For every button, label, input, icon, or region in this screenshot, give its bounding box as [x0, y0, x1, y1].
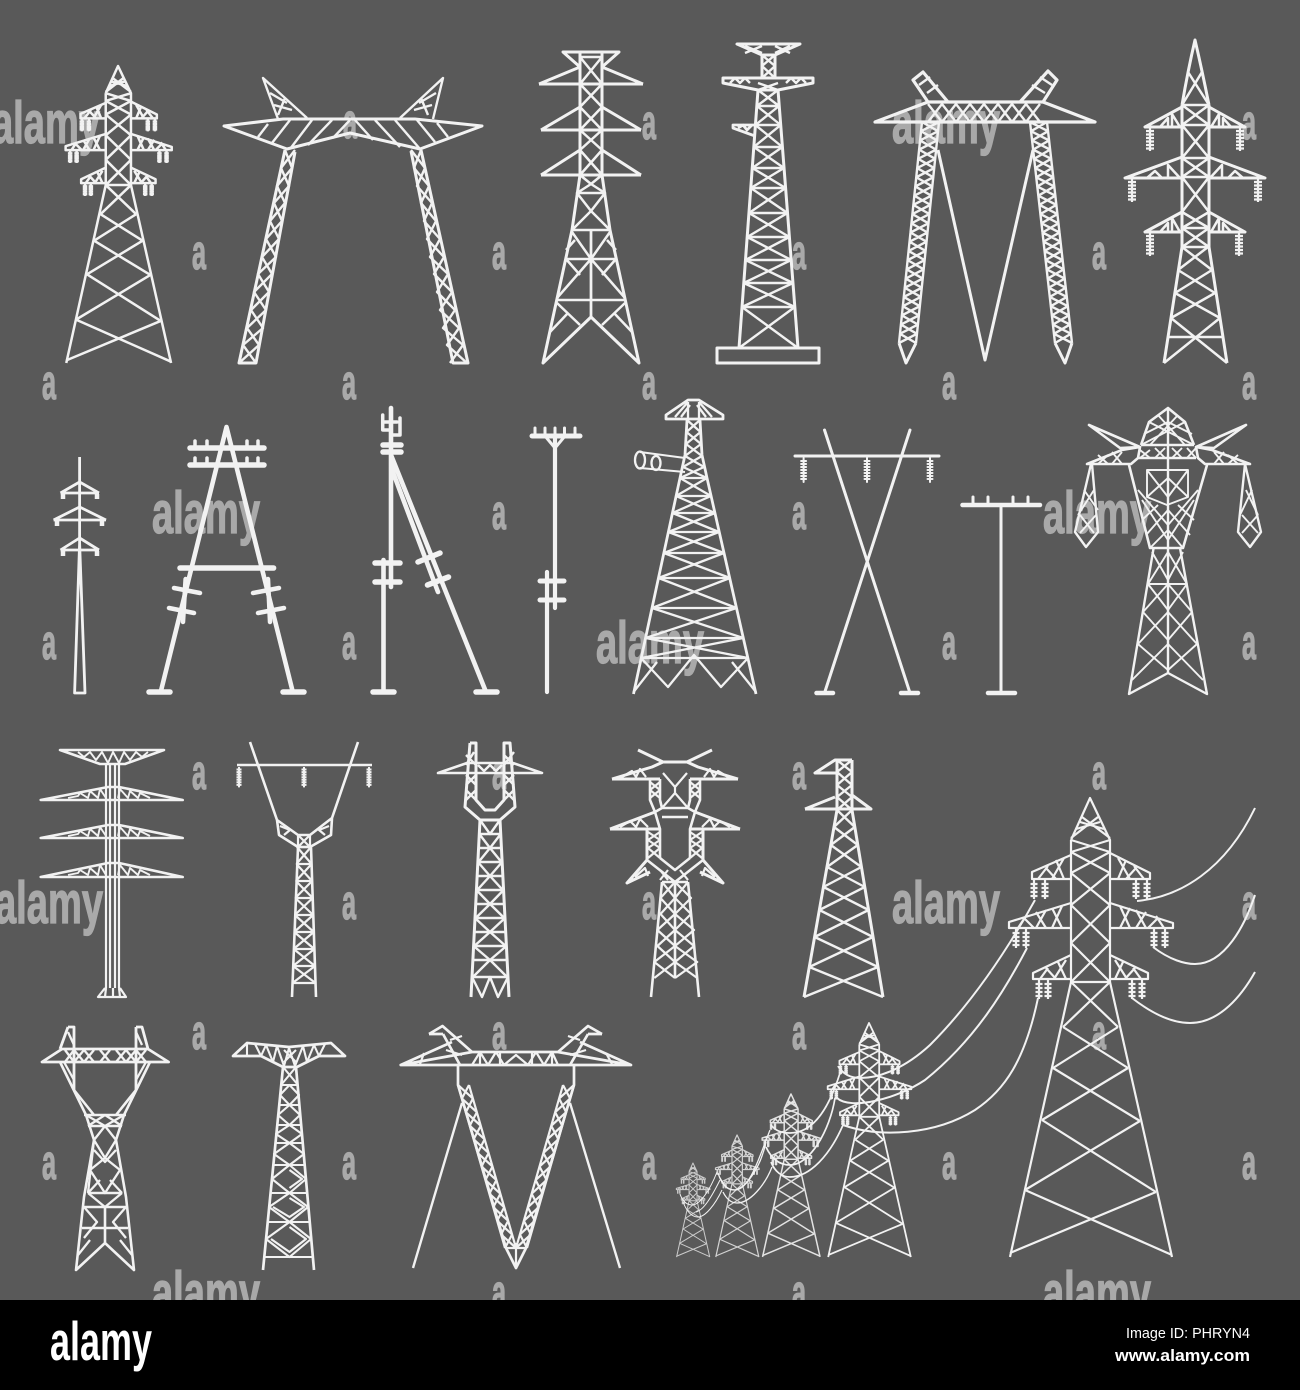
tower 5: M-shaped guyed pylon	[875, 71, 1095, 363]
power line: smallest tower in the chain	[676, 1163, 710, 1257]
tower 7: slim pole with small arms	[54, 457, 106, 693]
watermarks: a	[343, 95, 357, 149]
tower 20: beam-topped waisted pylon	[42, 1027, 169, 1270]
watermarks: a	[642, 96, 656, 150]
watermarks: a	[792, 226, 806, 280]
watermarks: a	[492, 1006, 506, 1060]
watermarks: a	[942, 616, 956, 670]
watermarks: alamy	[892, 870, 1000, 936]
tower 15: four-arm tubular mast	[41, 750, 183, 997]
power line: second smallest tower	[715, 1135, 759, 1257]
tower 8: A-frame wooden pole	[149, 427, 304, 692]
tower 22: V-shaped guyed pylon	[401, 1026, 631, 1268]
watermarks: a	[792, 1266, 806, 1320]
tower 13: T-shaped pole	[962, 497, 1040, 693]
watermarks: alamy	[152, 480, 260, 546]
footer logo: alamy	[50, 1310, 152, 1372]
website: www.alamy.com	[1114, 1346, 1250, 1365]
tower 18: double-arch lattice pylon	[610, 750, 740, 997]
watermarks: alamy	[596, 610, 704, 676]
watermarks: a	[192, 1006, 206, 1060]
watermarks: alamy	[0, 870, 103, 936]
watermarks: alamy	[892, 90, 1000, 156]
watermarks: a	[792, 486, 806, 540]
tower 21: T-headed lattice mast	[233, 1043, 345, 1270]
wires between the towers	[680, 808, 1255, 1217]
watermarks: a	[492, 1266, 506, 1320]
watermarks: a	[492, 226, 506, 280]
watermarks: a	[492, 486, 506, 540]
watermarks: alamy	[152, 1260, 260, 1326]
tower 12: X-shaped pole with crossbar	[795, 430, 939, 693]
tower 4: tapered tower on a rectangular base	[717, 44, 819, 363]
watermarks: a	[642, 1136, 656, 1190]
watermarks: a	[1092, 1006, 1106, 1060]
tower 16: Y-shaped pylon with insulators	[236, 742, 372, 997]
image id: Image ID: PHRYN4	[1126, 1325, 1250, 1342]
watermarks: a	[42, 616, 56, 670]
footer bar	[0, 1300, 1300, 1390]
tower 10: single pole with crossarm	[532, 428, 580, 692]
watermarks: alamy	[1043, 1260, 1151, 1326]
watermarks: a	[1242, 96, 1256, 150]
watermarks: a	[792, 1006, 806, 1060]
tower 19: small asymmetric pylon	[804, 760, 883, 997]
watermarks: a	[942, 1136, 956, 1190]
watermarks: a	[1242, 1136, 1256, 1190]
watermarks: a	[1242, 356, 1256, 410]
power line: middle tower	[762, 1094, 820, 1257]
watermarks: a	[1242, 616, 1256, 670]
watermarks: a	[42, 356, 56, 410]
tower 1: lattice pylon with three arm pairs	[66, 66, 172, 363]
tower 14: ornate figure-shaped pylon	[1075, 408, 1261, 694]
tower 11: lattice tower with side drum	[634, 400, 756, 694]
watermarks: a	[192, 226, 206, 280]
watermarks: a	[342, 1136, 356, 1190]
watermarks: a	[42, 1136, 56, 1190]
watermarks: a	[642, 876, 656, 930]
tower 9: pole with diagonal brace	[373, 408, 497, 692]
power line: near tower	[828, 1023, 911, 1257]
watermarks: a	[192, 746, 206, 800]
watermarks: a	[342, 356, 356, 410]
tower 6: pointed pylon with insulators	[1125, 40, 1265, 363]
watermarks: a	[642, 356, 656, 410]
tower 3: stepped triangular arm pylon	[539, 52, 643, 363]
watermarks: a	[342, 876, 356, 930]
tower 2: wide portal pylon with horns	[224, 78, 482, 363]
watermarks: a	[1092, 746, 1106, 800]
watermarks: alamy	[1043, 480, 1151, 546]
watermarks: a	[1092, 226, 1106, 280]
tower 17: U-headed heavy lattice mast	[438, 743, 542, 997]
watermarks: a	[492, 746, 506, 800]
watermarks: a	[342, 616, 356, 670]
watermarks: a	[1242, 876, 1256, 930]
watermarks: a	[942, 356, 956, 410]
power line: largest foreground tower	[1009, 798, 1173, 1257]
watermarks: a	[792, 746, 806, 800]
